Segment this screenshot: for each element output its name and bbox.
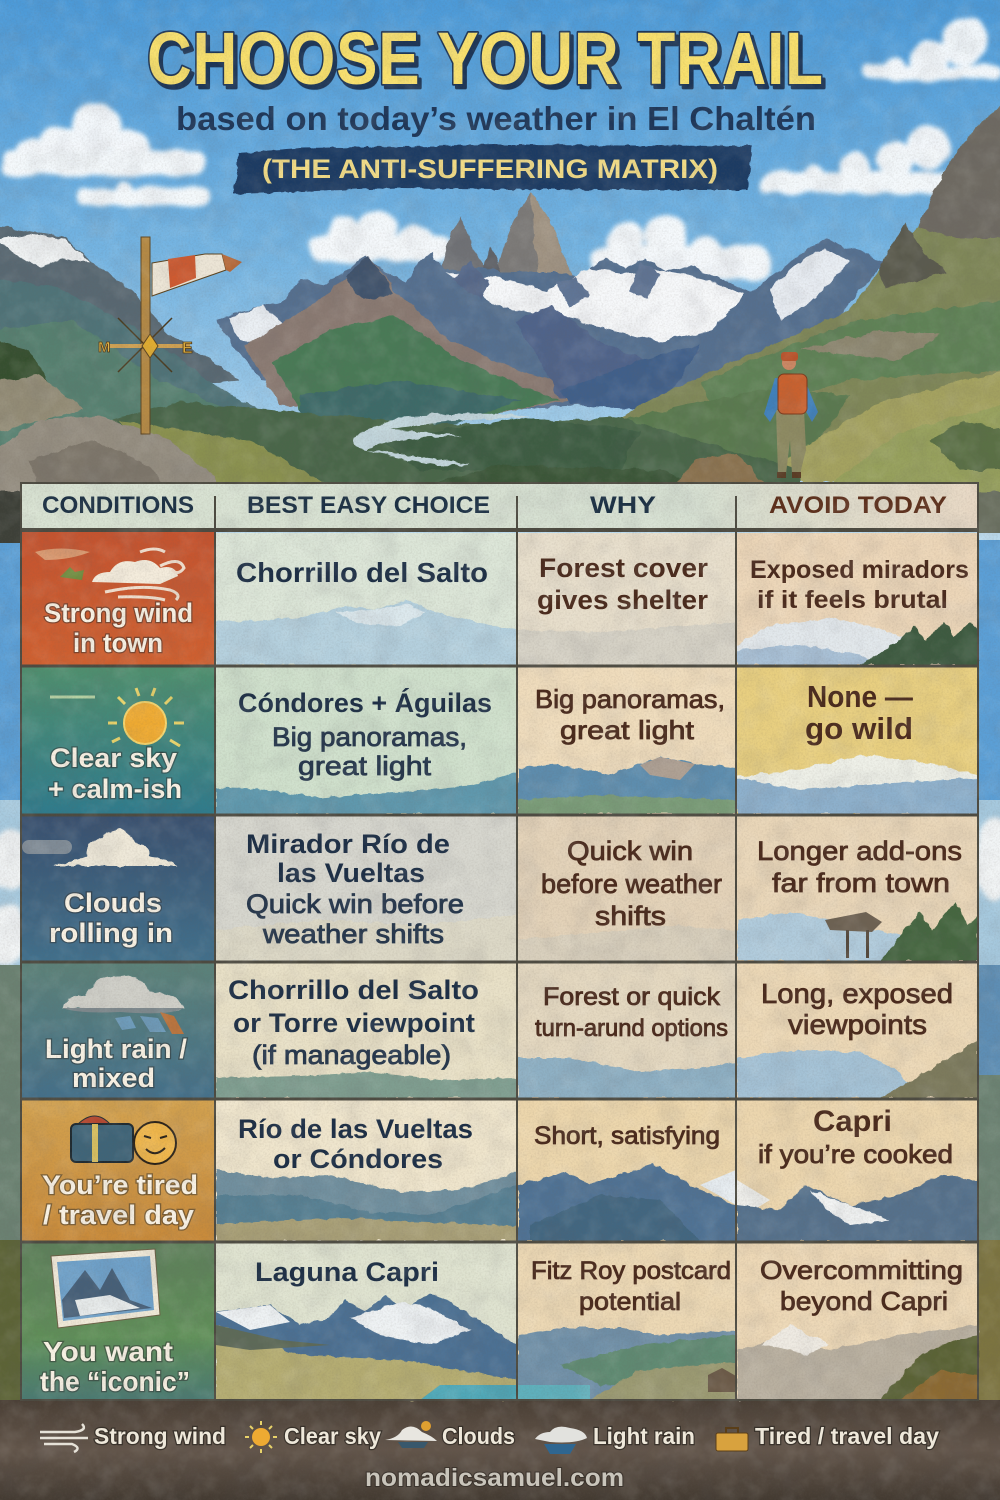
- legend item: light rain: [535, 1423, 695, 1454]
- why cell: Fitz Roy postcard: [518, 1243, 736, 1400]
- why cell: forest or quick: [518, 963, 736, 1098]
- legend: [40, 1421, 939, 1454]
- snow massif: [215, 238, 885, 410]
- choice cell: Chorrillo or Torre: (if manageable): [252, 1040, 451, 1070]
- choice cell: Río de las Vueltas: Río de las Vueltas: [238, 1114, 473, 1144]
- condition cell: clear sky: + calm-ish: [48, 774, 182, 804]
- choice cell: Cóndores + Águilas: Cóndores + Águilas: [238, 687, 492, 718]
- why cell: forest cover: Forest cover: [539, 553, 709, 583]
- row 1: strong wind: [21, 531, 978, 665]
- avoid cell: longer add-ons: Longer add-ons: [757, 836, 962, 866]
- ground strip under the table: [0, 1400, 1000, 1500]
- why cell: forest or quick: Forest or quick: [543, 983, 721, 1011]
- why cell: big panoramas: Big panoramas,: [535, 684, 725, 714]
- title: CHOOSE YOUR TRAIL: [147, 17, 823, 100]
- condition cell: clear sky: [21, 667, 215, 814]
- banner: the anti-suffering matrix: (THE ANTI-SUFFERING MATRIX): [262, 154, 718, 184]
- avoid cell: long, exposed: Long, exposed: [761, 978, 953, 1009]
- avoid cell: exposed miradors: [737, 533, 978, 665]
- clouds: [0, 18, 1000, 280]
- choice cell: Cóndores + Águilas: great light: [298, 751, 432, 781]
- why cell: short, satisfying: Short, satisfying: [534, 1122, 720, 1150]
- condition cell: strong wind: [21, 531, 215, 665]
- condition cell: strong wind: Strong wind: [44, 598, 193, 628]
- choice cell: Mirador Río de las Vueltas: Mirador Río de: [246, 829, 450, 859]
- legend item: clouds: [385, 1421, 515, 1449]
- condition cell: clear sky: Clear sky: [50, 743, 177, 773]
- condition cell: iconic: You want: [43, 1336, 173, 1367]
- legend item: light rain: Light rain: [593, 1423, 695, 1449]
- avoid cell: Capri if cooked: if you’re cooked: [758, 1139, 953, 1169]
- choice cell: Mirador Río de las Vueltas: [216, 816, 517, 961]
- header row: WHY: [590, 492, 656, 519]
- row 3: clouds: [21, 816, 978, 961]
- avoid cell: overcommitting: [737, 1243, 978, 1400]
- avoid cell: Capri if cooked: Capri: [813, 1105, 892, 1138]
- row 4: light rain: [21, 963, 978, 1098]
- why cell: forest cover: gives shelter: [537, 585, 709, 615]
- avoid cell: Capri if cooked: [737, 1100, 978, 1241]
- far left range: [0, 226, 320, 460]
- why cell: forest cover: [518, 533, 736, 665]
- choice cell: Laguna Capri: Laguna Capri: [255, 1257, 439, 1287]
- avoid cell: overcommitting: Overcommitting: [760, 1255, 963, 1285]
- choice cell: Chorrillo del Salto: Chorrillo del Salto: [236, 557, 488, 588]
- condition cell: tired: [21, 1100, 215, 1241]
- why cell: quick win: Quick win: [567, 836, 693, 866]
- website credit: nomadicsamuel.com: [365, 1464, 624, 1492]
- choice cell: Chorrillo del Salto: [216, 533, 517, 665]
- why cell: short, satisfying: [518, 1100, 736, 1241]
- condition cell: light rain: Light rain /: [45, 1034, 188, 1064]
- choice cell: Chorrillo or Torre: Chorrillo del Salto: [228, 975, 479, 1005]
- choice cell: Chorrillo or Torre: [216, 963, 517, 1098]
- table grid lines: [21, 483, 978, 1400]
- row 6: iconic: [21, 1243, 978, 1400]
- why cell: big panoramas: [518, 667, 736, 814]
- avoid cell: overcommitting: beyond Capri: [780, 1286, 948, 1316]
- choice cell: Cóndores + Águilas: [216, 667, 517, 814]
- icon: windsock and compass vane: M: [98, 339, 110, 356]
- condition cell: clouds: [21, 816, 215, 961]
- valley floor: [0, 402, 800, 492]
- avoid cell: longer add-ons: far from town: [772, 868, 950, 898]
- central foreground mountain: [245, 256, 700, 430]
- why cell: Fitz Roy postcard: potential: [579, 1288, 681, 1316]
- choice cell: Chorrillo or Torre: or Torre viewpoint: [233, 1008, 475, 1038]
- Fitz Roy spires: [440, 192, 572, 278]
- avoid cell: none, go wild: go wild: [805, 711, 913, 746]
- condition cell: strong wind: in town: [73, 628, 163, 658]
- condition cell: tired: You’re tired: [42, 1170, 198, 1200]
- icon: windsock and compass vane: E: [182, 340, 193, 357]
- choice cell: Mirador Río de las Vueltas: Quick win before: [246, 889, 464, 919]
- header row: AVOID TODAY: [769, 492, 947, 519]
- avoid cell: none, go wild: None —: [807, 679, 913, 714]
- legend item: clear sky: Clear sky: [284, 1423, 381, 1449]
- why cell: quick win: shifts: [595, 901, 666, 931]
- choice cell: Mirador Río de las Vueltas: las Vueltas: [277, 858, 425, 888]
- condition cell: clouds: Clouds: [64, 888, 162, 918]
- legend item: strong wind: Strong wind: [94, 1423, 226, 1449]
- legend item: clear sky: [245, 1421, 381, 1453]
- icon: hiker with orange backpack: [764, 352, 818, 478]
- table: [21, 483, 978, 1400]
- icon: windsock and compass vane: [98, 237, 242, 434]
- choice cell: Cóndores + Águilas: Big panoramas,: [272, 722, 467, 752]
- avoid cell: long, exposed: [737, 963, 978, 1098]
- choice cell: Río de las Vueltas: [216, 1100, 517, 1241]
- choice cell: Mirador Río de las Vueltas: weather shifts: [262, 919, 444, 949]
- why cell: forest or quick: turn-arund options: [535, 1015, 728, 1042]
- legend item: tired, travel day: Tired / travel day: [755, 1423, 939, 1449]
- right foreground: [400, 405, 1000, 492]
- left foreground rocks: [0, 340, 340, 492]
- river: [352, 414, 530, 465]
- condition cell: iconic: the “iconic”: [40, 1366, 190, 1397]
- legend item: strong wind: [40, 1423, 226, 1452]
- avoid cell: longer add-ons: [737, 816, 978, 961]
- condition cell: clouds: rolling in: [49, 918, 173, 948]
- legend item: clouds: Clouds: [442, 1423, 515, 1449]
- header row: [21, 483, 978, 529]
- condition cell: iconic: [21, 1243, 215, 1400]
- choice cell: Laguna Capri: [216, 1243, 517, 1400]
- why cell: Fitz Roy postcard: Fitz Roy postcard: [531, 1257, 731, 1285]
- why cell: quick win: before weather: [541, 869, 722, 899]
- avoid cell: exposed miradors: if it feels brutal: [757, 586, 948, 614]
- condition cell: light rain: [21, 963, 215, 1098]
- row 2: clear sky: [21, 667, 978, 814]
- condition cell: light rain: mixed: [72, 1063, 155, 1093]
- banner: the anti-suffering matrix: [233, 145, 752, 194]
- why cell: big panoramas: great light: [560, 715, 695, 745]
- why cell: quick win: [518, 816, 736, 961]
- subtitle: based on today’s weather in El Chaltén: [176, 100, 816, 137]
- avoid cell: long, exposed: viewpoints: [788, 1009, 927, 1040]
- avoid cell: none, go wild: [737, 667, 978, 814]
- avoid cell: exposed miradors: Exposed miradors: [750, 556, 969, 584]
- choice cell: Río de las Vueltas: or Cóndores: [273, 1144, 443, 1174]
- header row: BEST EASY CHOICE: [247, 492, 490, 519]
- illustration: mountain landscape: [0, 100, 1000, 492]
- condition cell: tired: / travel day: [43, 1200, 194, 1230]
- header row: CONDITIONS: [42, 492, 194, 519]
- right hillside: [590, 100, 1000, 482]
- row 5: tired: [21, 1100, 978, 1241]
